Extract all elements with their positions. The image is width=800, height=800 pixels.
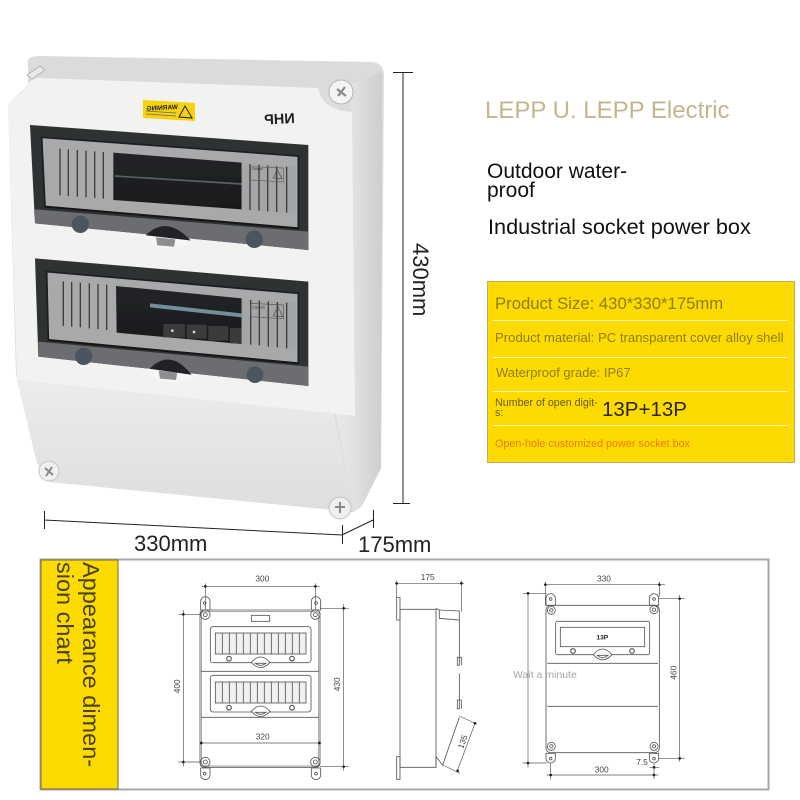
spec: waterproof grade: Waterproof grade: IP67 [496,365,631,380]
dimension labels: 430 [332,677,342,691]
box front lower wedge [17,380,354,512]
subtitle: outdoor waterproof: proof [487,179,535,202]
spec: product size: Product Size: 430*330*175mm [495,294,723,313]
dimension labels: 7.5 [636,757,648,767]
lower breaker window: Caution [252,306,265,310]
box front upper face [8,78,355,416]
dimension labels [595,573,679,774]
dimension labels: 330 [597,573,611,583]
spec: custom note: Open-hole customized power socket box [495,438,691,450]
dimension labels [421,572,470,750]
dimension labels: 460 [669,665,679,680]
screw bottom left [39,461,59,481]
spec: number of open digits: s: [495,407,503,419]
dimension labels: 175 [421,572,435,582]
warning label: WARNING [146,104,178,113]
sidebar label: sion chart [52,562,78,664]
dimension labels: 13P [596,634,609,641]
sidebar label [41,560,118,789]
panel: appearance dimension chart [40,560,768,790]
dimension: height 430mm [393,72,433,504]
box right side wall [336,72,382,512]
drawing: front view 13P [523,573,685,779]
box body silhouette [8,56,384,512]
lower breaker window [35,258,308,386]
upper breaker window [30,125,308,250]
sidebar label: Appearance dimen- [78,562,104,767]
spec: number of open digits: Number of open digit- [495,397,598,409]
screw bottom right [329,497,351,519]
dimension: width 330mm [44,511,342,556]
brand mark NHP: NHP [263,111,295,129]
dimension labels: 300 [595,764,609,774]
dimension: depth 175mm [342,510,431,557]
dimension labels: 320 [256,731,270,741]
box top lid edge [30,58,382,88]
dimension: width 330mm: 330mm [134,531,207,556]
spec: 13P+13P value: 13P+13P [602,398,687,421]
dimension labels: 400 [172,679,182,693]
watermark text: Wait a minute [513,669,577,681]
subtitle: socket power box: Industrial socket power box [488,214,751,239]
dimension labels [172,573,342,741]
product photo: enclosure box [8,56,384,519]
drawing: front view 13P+13P [172,573,349,780]
dimension: depth 175mm: 175mm [358,532,431,557]
upper breaker window: Caution [252,167,263,171]
warning label [143,100,195,121]
screw top left [27,66,45,79]
dimension: height 430mm: 430mm [408,243,433,316]
dimension labels: 135 [455,733,470,750]
drawing: side view [395,572,477,779]
brand title: LEPP U. LEPP Electric [485,97,730,124]
subtitle: outdoor waterproof: Outdoor water- [487,160,627,183]
dimension labels: 300 [255,573,270,583]
panel: product specification [488,282,794,462]
spec: material: Product material: PC transparent cover alloy shell [495,330,784,345]
screw top right [329,80,353,104]
